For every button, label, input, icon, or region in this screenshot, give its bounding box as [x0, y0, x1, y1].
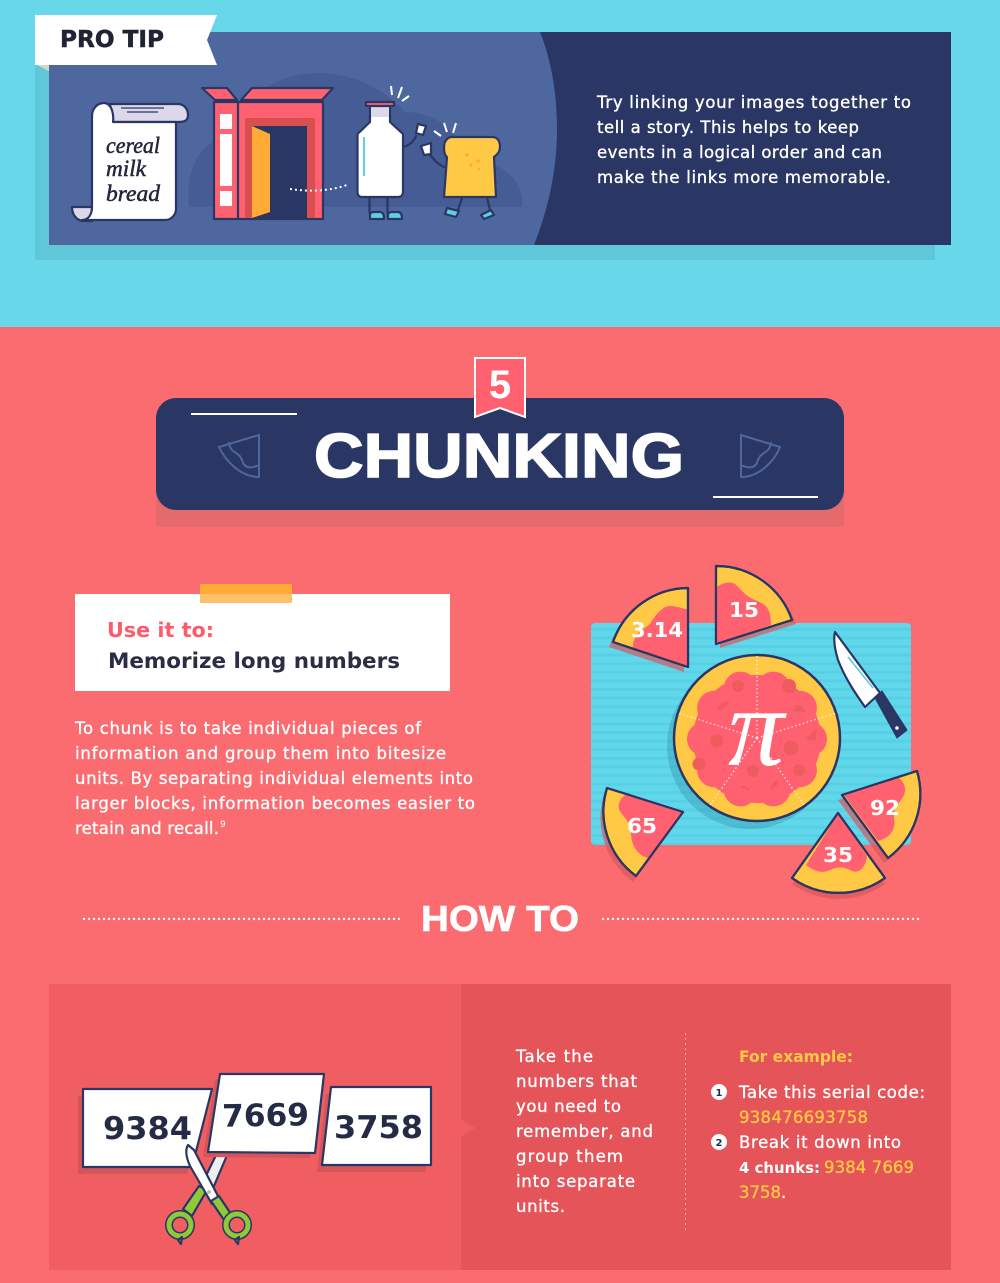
slice: 92: [838, 771, 920, 863]
panel: how to: [49, 984, 951, 1270]
text: instructions: numbers that: [516, 1072, 638, 1091]
card: use it to: Memorize long numbers: [108, 649, 400, 673]
text: chunking description: To chunk is to take individual pieces of: [74, 719, 422, 738]
text: chunking description: retain and recall.: [75, 819, 219, 838]
slice: 15: [716, 566, 796, 648]
icon: shopping list scroll: [72, 103, 188, 221]
text: instructions: into separate: [516, 1172, 635, 1191]
number card 2: [203, 1074, 324, 1158]
background: cyan top band: [0, 0, 1000, 327]
icon: milk bottle: [358, 86, 426, 219]
background: coral section: [0, 327, 1000, 1283]
text: example: Take this serial code:: [738, 1083, 925, 1102]
text: pro tip body: events in a logical order and can: [597, 143, 882, 162]
text: instructions: [515, 1047, 653, 1216]
ribbon: number 5: 5: [489, 363, 511, 407]
slice: 35: 35: [823, 843, 853, 867]
dark text area: [534, 32, 951, 245]
section heading: chunking: [156, 358, 844, 527]
slice: 92: 92: [870, 796, 900, 820]
text: example: [711, 1047, 925, 1202]
text: instructions: you need to: [516, 1097, 621, 1116]
slice: 65: [600, 788, 683, 882]
pizza: π: [728, 666, 787, 790]
slice: 65: 65: [627, 814, 657, 838]
number card 1: 9384: [103, 1111, 192, 1147]
text: example: 3758: [739, 1183, 781, 1202]
text: instructions: group them: [516, 1147, 623, 1166]
slice: 3.14: 3.14: [631, 618, 683, 642]
text: chunking description: [74, 719, 475, 838]
banner: pro tip: PRO TIP: [60, 27, 164, 53]
icon: shopping list scroll: bread: [106, 181, 161, 206]
icon: shopping list scroll: milk: [106, 156, 147, 181]
text: example: .: [781, 1183, 786, 1202]
icon: pizza slice right: [741, 435, 780, 477]
text: chunking description: 9: [220, 820, 226, 830]
text: instructions: remember, and: [516, 1122, 653, 1141]
text: example: For example:: [739, 1047, 853, 1066]
text: pro tip body: [596, 93, 911, 187]
text: example: Break it down into: [739, 1133, 901, 1152]
number card 1: [78, 1089, 212, 1174]
illustration: scissors cutting numbers: [78, 1074, 431, 1244]
text: instructions: Take the: [515, 1047, 593, 1066]
banner: pro tip: [35, 15, 217, 71]
ribbon: number 5: [475, 358, 525, 417]
icon: toast: [421, 123, 500, 219]
number card 2: 7669: [222, 1097, 309, 1135]
bullet 2: [711, 1134, 727, 1150]
text: pro tip body: Try linking your images together to: [596, 93, 911, 112]
slice: 15: 15: [729, 598, 759, 622]
slice: 35: [792, 813, 885, 899]
heading: how to: HOW TO: [421, 898, 579, 939]
bullet 1: [711, 1084, 727, 1100]
pizza: [667, 655, 840, 829]
card: use it to: Use it to:: [107, 618, 214, 642]
text: chunking description: information and group them into bitesize: [75, 744, 446, 763]
dotted path: [290, 185, 347, 191]
text: chunking description: units. By separating individual elements into: [75, 769, 473, 788]
icon: pizza slice left: [219, 435, 259, 477]
title: CHUNKING: [314, 422, 684, 491]
card: use it to: [75, 584, 450, 691]
number card 3: 3758: [334, 1110, 423, 1146]
cutting board: [591, 623, 911, 845]
illustration: pi pizza: [591, 566, 920, 899]
cloud backdrop: [188, 73, 522, 207]
text: example: 938476693758: [739, 1108, 868, 1127]
text: pro tip body: make the links more memorable.: [597, 168, 891, 187]
text: example: 4 chunks:: [739, 1159, 820, 1177]
panel: pro tip: [35, 15, 951, 260]
icon: knife: [834, 632, 907, 738]
slice: 3.14: [609, 588, 688, 672]
text: instructions: units.: [516, 1197, 565, 1216]
scissors: [169, 1145, 248, 1244]
text: chunking description: larger blocks, information becomes easier to: [75, 794, 475, 813]
text: example: 9384 7669: [824, 1158, 914, 1177]
icon: shopping list scroll: cereal: [106, 133, 160, 158]
bullet 2: 2: [716, 1138, 723, 1149]
bullet 1: 1: [716, 1088, 723, 1099]
number card 3: [317, 1087, 431, 1172]
text: pro tip body: tell a story. This helps to keep: [597, 118, 859, 137]
icon: cereal box: [202, 88, 333, 219]
